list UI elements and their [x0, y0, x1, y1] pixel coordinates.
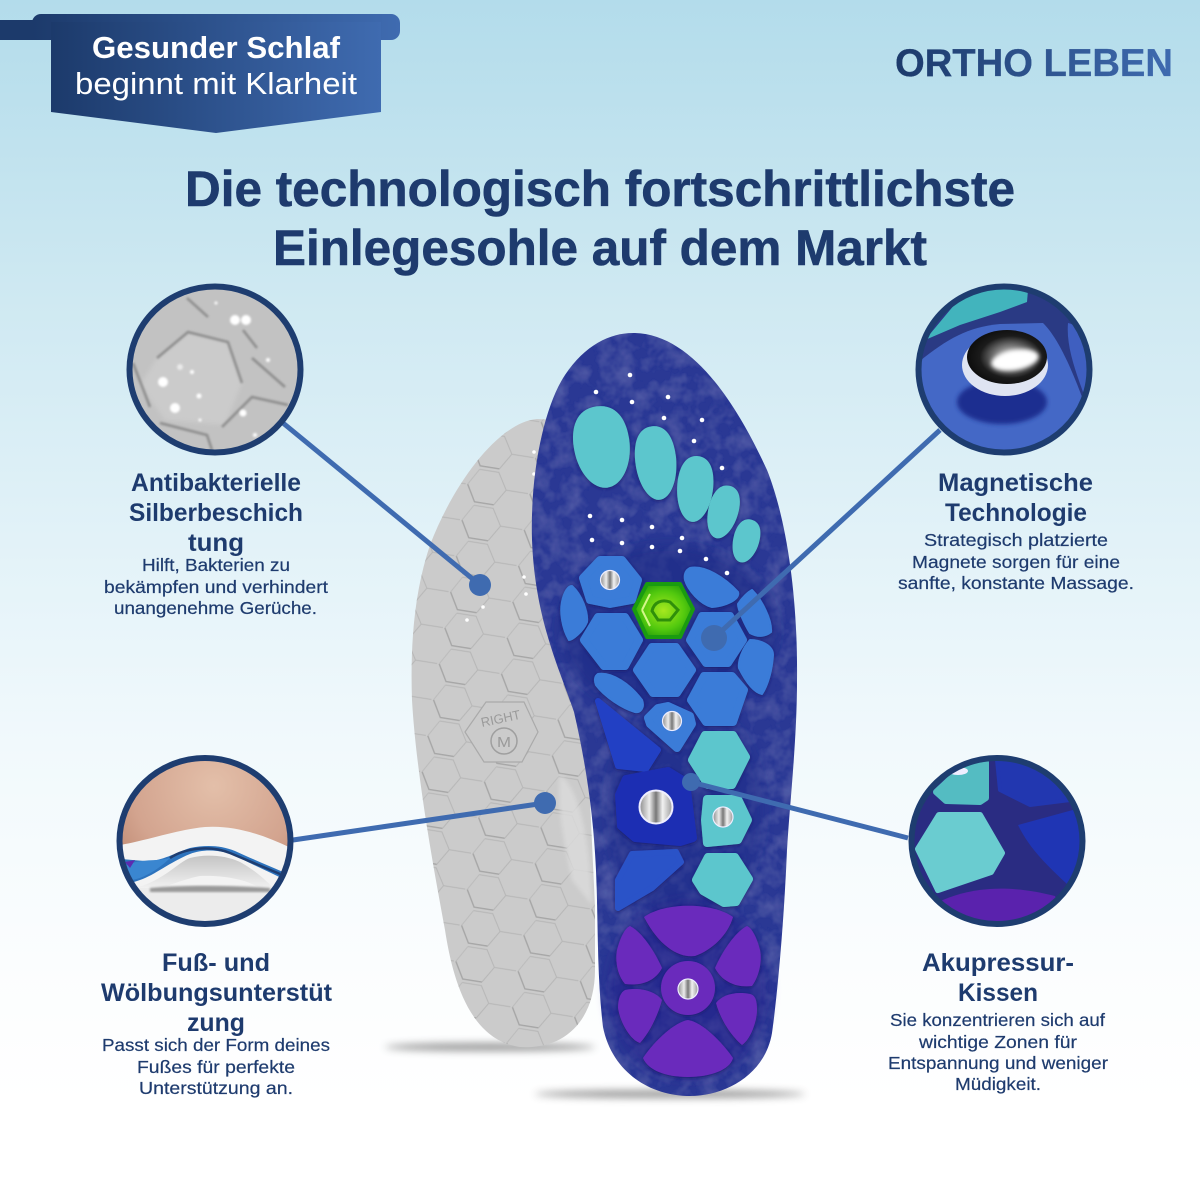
- text block: magnet: Technologie: [945, 499, 1087, 527]
- text block: arch support: zung: [187, 1009, 245, 1037]
- text block: acupressure: Kissen: [958, 979, 1038, 1007]
- green hexagon pad: [634, 584, 693, 637]
- teal toe pads: [569, 403, 764, 566]
- text block: silver coating: Silberbeschich: [129, 499, 303, 527]
- text block: magnet: [898, 469, 1134, 593]
- text block: acupressure: Entspannung und weniger: [888, 1053, 1108, 1073]
- banner heading: Gesunder Schlaf: [92, 30, 341, 65]
- text block: silver coating: Hilft, Bakterien zu: [142, 555, 290, 575]
- lower midfoot pads: [598, 701, 749, 908]
- circle: silver coating detail: [125, 280, 305, 460]
- heel shadow: [608, 900, 768, 1080]
- banner: [0, 14, 400, 133]
- text block: magnet: Magnete sorgen für eine: [912, 552, 1120, 572]
- text block: magnet: Strategisch platzierte: [924, 530, 1108, 550]
- shadows under insoles: [385, 1043, 805, 1098]
- circle: magnet detail: [915, 280, 1095, 460]
- text block: acupressure: [888, 949, 1108, 1094]
- ventilation dots: [588, 373, 729, 575]
- banner: beginnt mit Klarheit: [75, 66, 357, 101]
- title: Die technologisch fortschrittlichste: [185, 161, 1015, 217]
- text block: silver coating: tung: [188, 529, 244, 557]
- size mark: M: [497, 734, 511, 751]
- text block: arch support: [101, 949, 333, 1098]
- connector: magnet: [701, 430, 940, 651]
- text block: arch support: Fuß- und: [162, 949, 270, 977]
- size mark: RIGHT: [480, 707, 522, 730]
- text block: arch support: Passt sich der Form deines: [102, 1035, 330, 1055]
- connector: silver coating: [283, 423, 491, 596]
- midfoot shadow: [607, 700, 763, 920]
- text block: acupressure: Akupressur-: [922, 949, 1074, 977]
- text block: arch support: Unterstützung an.: [139, 1078, 293, 1098]
- text block: acupressure: wichtige Zonen für: [918, 1032, 1077, 1052]
- text block: magnet: sanfte, konstante Massage.: [898, 573, 1134, 593]
- circle: acupressure detail: [908, 755, 1086, 927]
- blue forefoot pads: [561, 560, 773, 748]
- title: [185, 161, 1015, 276]
- text block: arch support: Fußes für perfekte: [137, 1057, 295, 1077]
- connector: acupressure: [682, 773, 908, 838]
- forefoot shadow: [560, 545, 776, 715]
- purple heel pads: [616, 906, 761, 1077]
- text block: silver coating: Antibakterielle: [131, 469, 301, 497]
- size mark: [465, 702, 538, 762]
- logo: ORTHO LEBEN: [895, 42, 1173, 85]
- blue insole: [532, 333, 797, 1096]
- gray insole underside: [405, 415, 605, 1055]
- circle: arch support detail: [115, 750, 295, 933]
- text block: silver coating: bekämpfen und verhindert: [104, 577, 328, 597]
- connector: arch support: [293, 792, 556, 840]
- text block: magnet: Magnetische: [938, 469, 1093, 497]
- metal studs: [600, 570, 733, 999]
- text block: arch support: Wölbungsunterstüt: [101, 979, 333, 1007]
- text block: silver coating: [104, 469, 328, 618]
- text block: acupressure: Sie konzentrieren sich auf: [890, 1010, 1105, 1030]
- text block: acupressure: Müdigkeit.: [955, 1074, 1041, 1094]
- text block: silver coating: unangenehme Gerüche.: [114, 598, 317, 618]
- title: Einlegesohle auf dem Markt: [273, 220, 927, 276]
